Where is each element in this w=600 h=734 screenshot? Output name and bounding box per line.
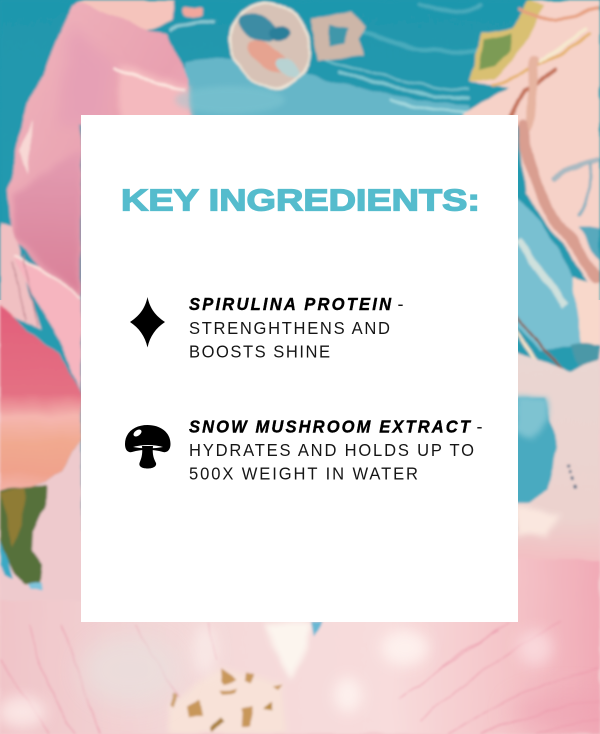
- icon: four-point star: [130, 297, 165, 348]
- petal veins: [0, 622, 600, 734]
- ingredient: spirulina protein: SPIRULINA PROTEIN: [189, 293, 392, 314]
- ingredient: spirulina protein: [189, 293, 404, 362]
- green stem: [0, 483, 46, 584]
- pale lower-left region: [0, 440, 81, 600]
- ingredient: snow mushroom extract: HYDRATES AND HOLDS UP TO: [189, 439, 474, 460]
- upper right flower: [462, 0, 600, 300]
- stamen base: [168, 668, 285, 734]
- light pink petal: [13, 255, 81, 392]
- icon: mushroom: [125, 425, 170, 468]
- ingredient: spirulina protein: BOOSTS SHINE: [189, 341, 330, 362]
- stamen anthers: [170, 668, 282, 733]
- ingredient: spirulina protein: -: [398, 294, 404, 314]
- left pale petal behind: [0, 222, 42, 328]
- right side water strip: [515, 198, 582, 350]
- ingredient: spirulina protein: STRENGHTHENS AND: [189, 317, 390, 338]
- hot pink lower-left petal: [0, 305, 81, 494]
- panel: white card: [81, 115, 518, 622]
- heading: KEY INGREDIENTS:: [121, 184, 480, 218]
- ingredient: snow mushroom extract: 500X WEIGHT IN WATER: [189, 463, 418, 484]
- lighter water below droplet: [184, 59, 470, 125]
- ingredient: snow mushroom extract: SNOW MUSHROOM EXTRACT: [189, 416, 471, 437]
- bottom flower base: [0, 530, 600, 734]
- water droplet: [170, 0, 366, 102]
- upper left petal: [8, 0, 192, 310]
- ingredient: snow mushroom extract: [189, 416, 482, 484]
- water ripples: [325, 5, 480, 112]
- ingredient: snow mushroom extract: -: [476, 416, 482, 436]
